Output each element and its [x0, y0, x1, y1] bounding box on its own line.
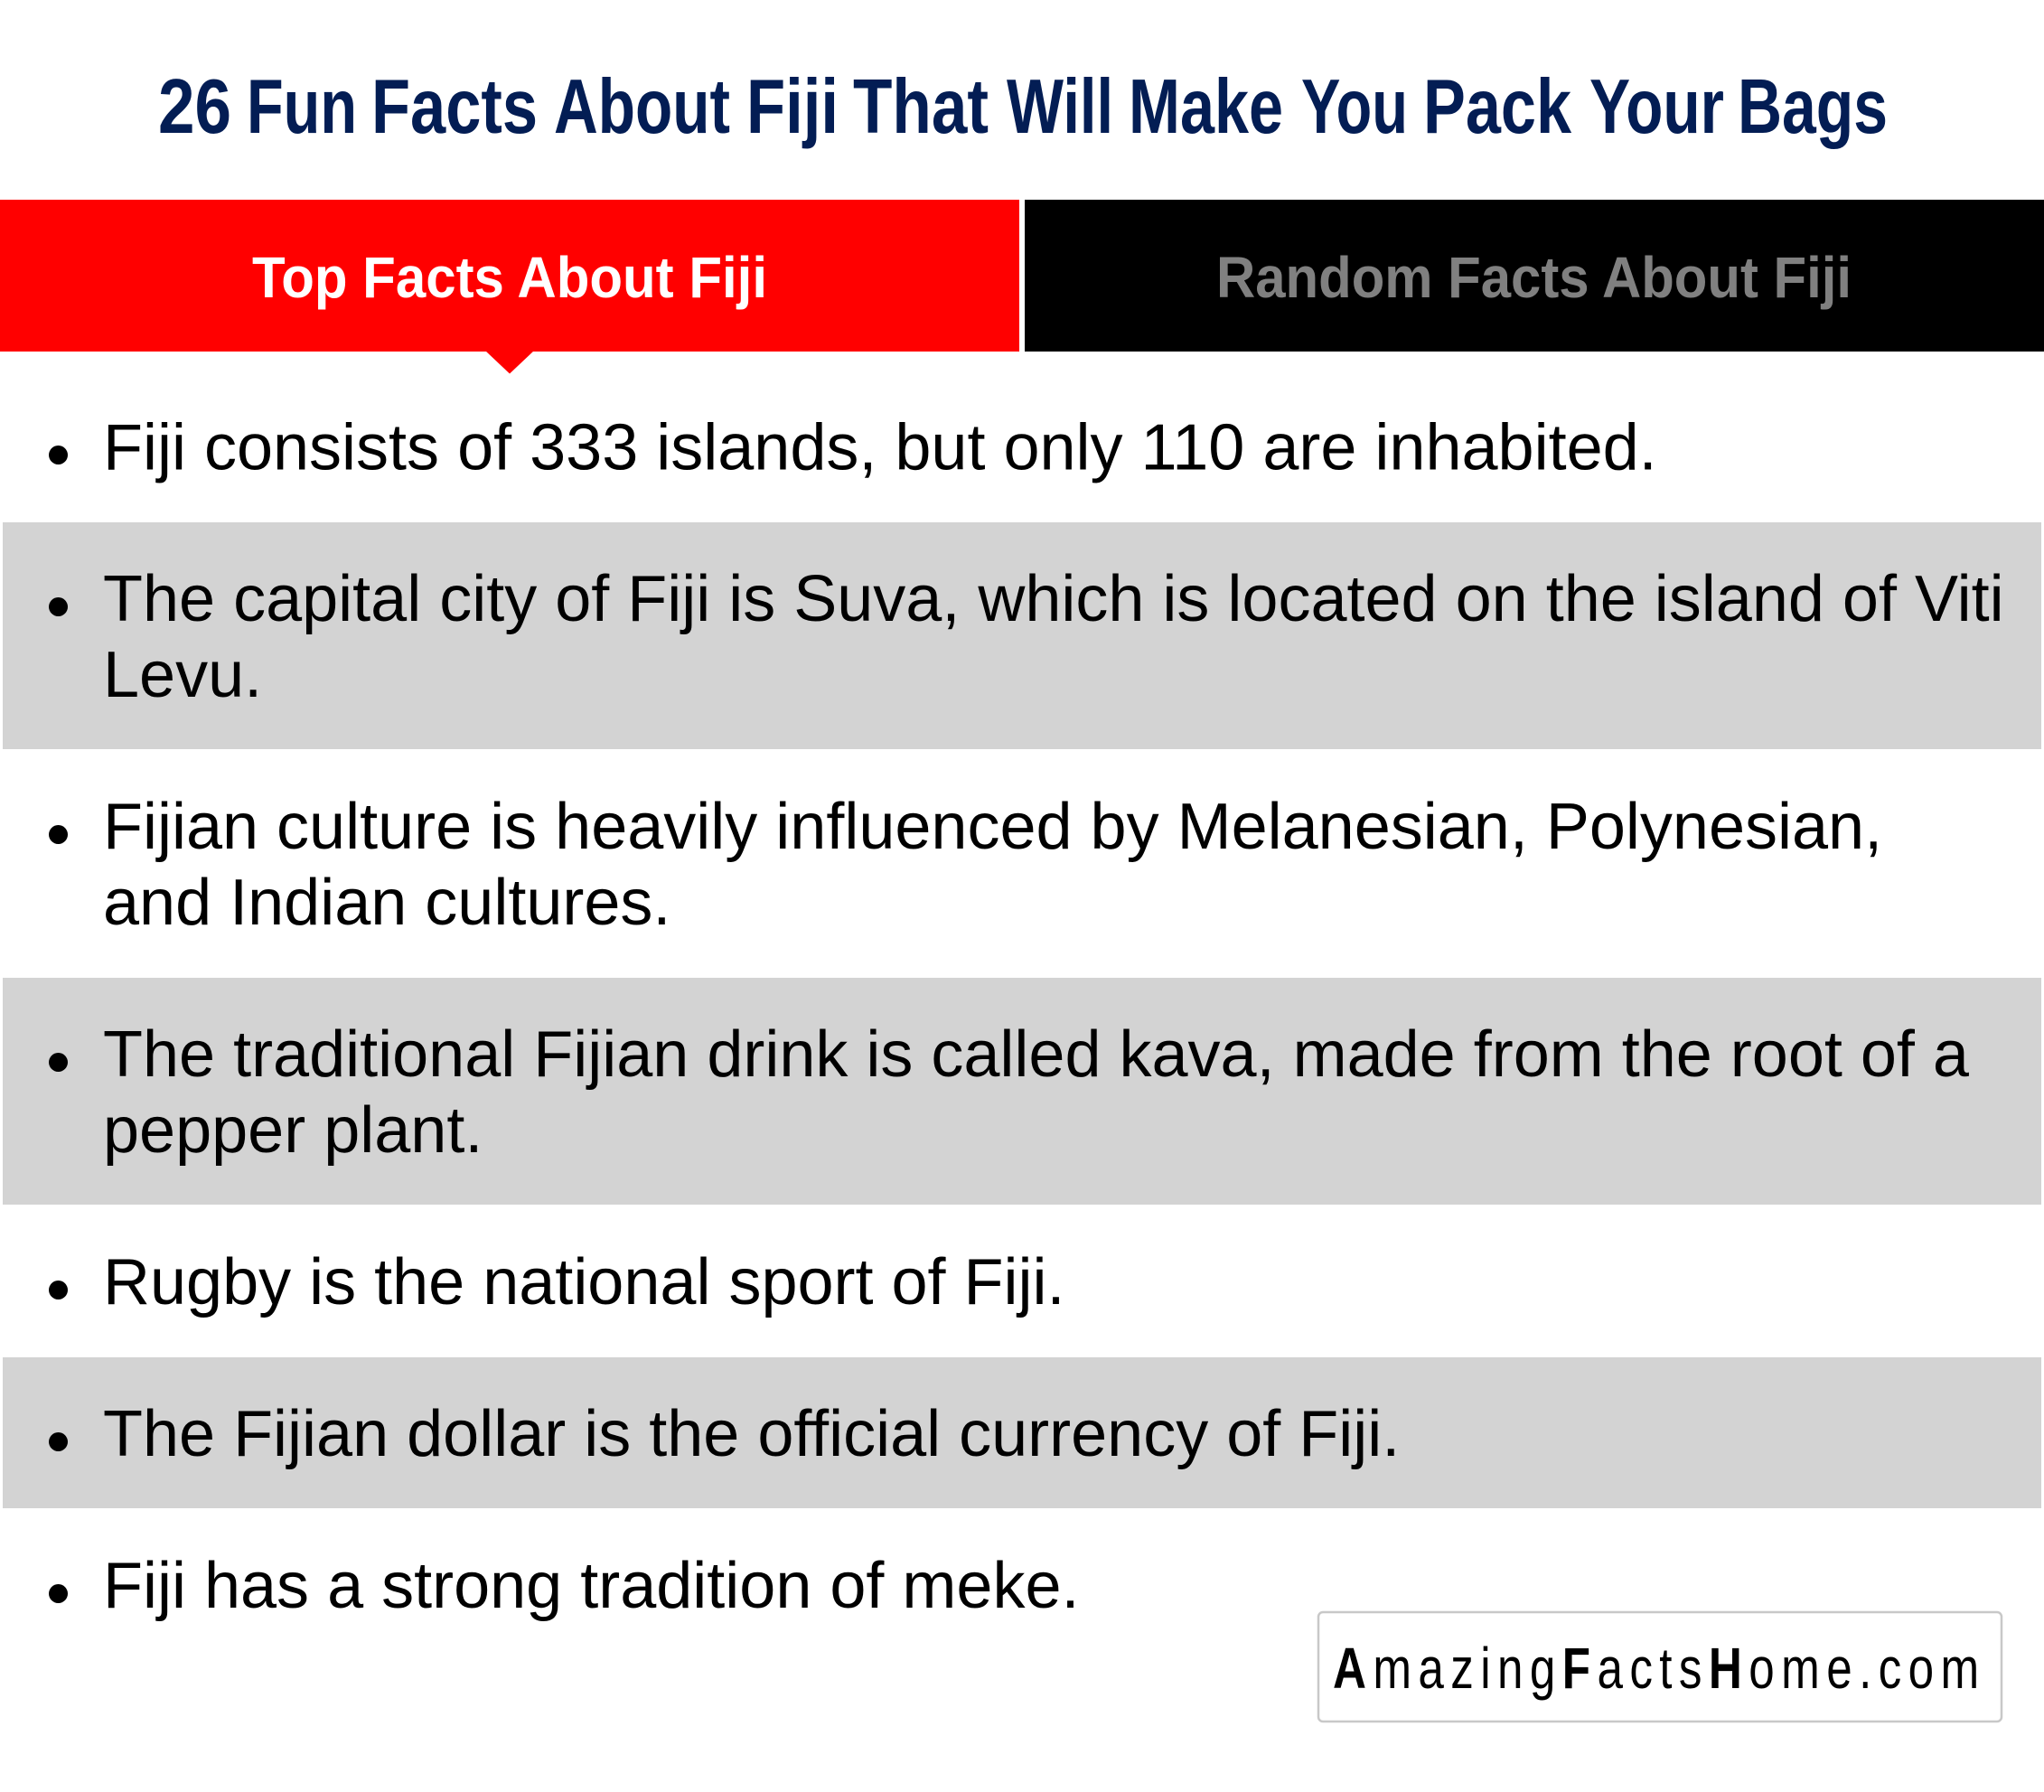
title: That — [853, 64, 989, 150]
tab pointer arrow — [485, 351, 534, 374]
title: Will — [1007, 64, 1113, 150]
tab: random facts (inactive) — [1025, 200, 2044, 352]
fact 4 row: The traditional Fijian drink is called kava, made from the root of a — [103, 1018, 1970, 1091]
fact 3: and Indian cultures. — [103, 867, 670, 939]
fact 4 row — [3, 978, 2041, 1205]
fact 7: Fiji has a strong tradition of meke. — [103, 1550, 1079, 1622]
title: Pack — [1423, 64, 1572, 150]
tab: top facts (active) — [0, 200, 1019, 374]
fact 5: Rugby is the national sport of Fiji. — [103, 1246, 1065, 1318]
fact 2 row — [3, 522, 2041, 749]
fact 3: Fijian culture is heavily influenced by Melanesian, Polynesian, — [103, 791, 1882, 863]
fact 2 row: The capital city of Fiji is Suva, which is located on the island of Viti — [103, 563, 2004, 635]
fact 4 row: pepper plant. — [103, 1094, 483, 1167]
fact 3 — [49, 791, 1882, 939]
fact 6 row — [3, 1357, 2041, 1508]
fact 6 row: The Fijian dollar is the official currency of Fiji. — [103, 1398, 1400, 1470]
title — [158, 64, 1888, 150]
tab label: top facts: Top Facts About Fiji — [252, 245, 767, 310]
title: Your — [1589, 64, 1724, 150]
title: About — [554, 64, 730, 150]
watermark badge — [1318, 1612, 2002, 1722]
title: You — [1301, 64, 1408, 150]
title: Fiji — [746, 64, 839, 150]
title: 26 — [158, 64, 231, 150]
title: Fun — [247, 64, 357, 150]
watermark text: AmazingFactsHome.com — [1333, 1637, 1986, 1701]
title: Facts — [371, 64, 538, 150]
title: Make — [1129, 64, 1283, 150]
fact 2 row: Levu. — [103, 639, 262, 711]
tab label: random facts: Random Facts About Fiji — [1216, 245, 1852, 310]
title: Bags — [1738, 64, 1888, 150]
fact 1: Fiji consists of 333 islands, but only 110 are inhabited. — [103, 412, 1657, 484]
